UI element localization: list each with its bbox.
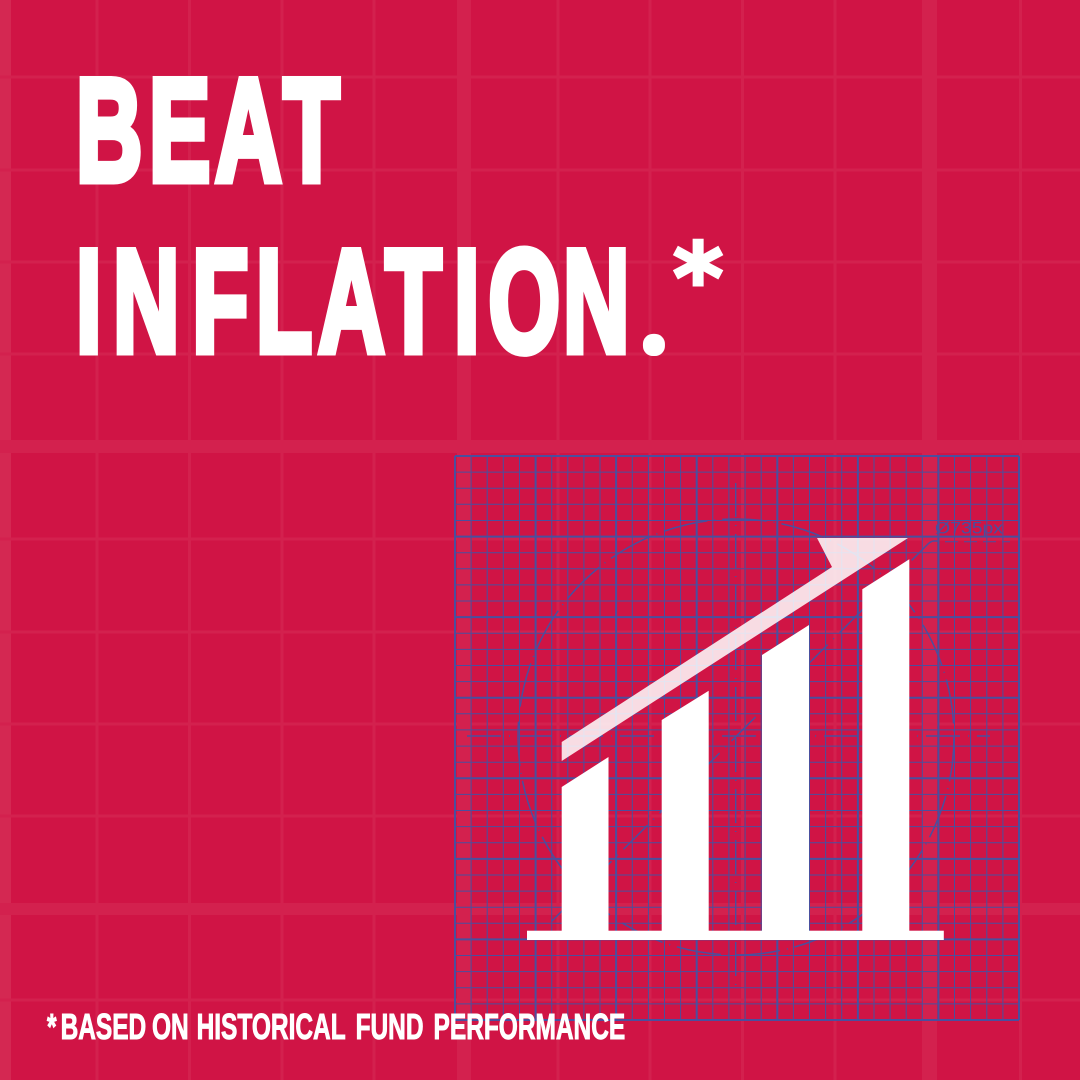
footnote: ON bbox=[152, 1006, 195, 1047]
blueprint grid and construction lines bbox=[455, 456, 1019, 1020]
asterisk: * bbox=[673, 223, 723, 335]
footnote: BASED bbox=[61, 1006, 153, 1047]
bar chart with rising bars bbox=[527, 559, 944, 940]
title bbox=[76, 49, 723, 383]
period: . bbox=[652, 333, 656, 349]
footnote: FUND bbox=[356, 1006, 430, 1047]
title line 1: BEAT bbox=[76, 49, 340, 212]
footnote: PERFORMANCE bbox=[434, 1006, 625, 1047]
bar 3 bbox=[762, 625, 809, 932]
footnote: * bbox=[47, 1006, 57, 1047]
trend arrow bbox=[562, 538, 908, 761]
dimension label: Ø735px bbox=[935, 518, 1004, 538]
bar 2 bbox=[662, 691, 709, 932]
bar 1 bbox=[562, 757, 608, 932]
bar 4 bbox=[862, 559, 909, 932]
title line 2: INFLATION bbox=[76, 220, 629, 383]
chart baseline bbox=[527, 931, 944, 940]
footnote: HISTORICAL bbox=[197, 1006, 352, 1047]
